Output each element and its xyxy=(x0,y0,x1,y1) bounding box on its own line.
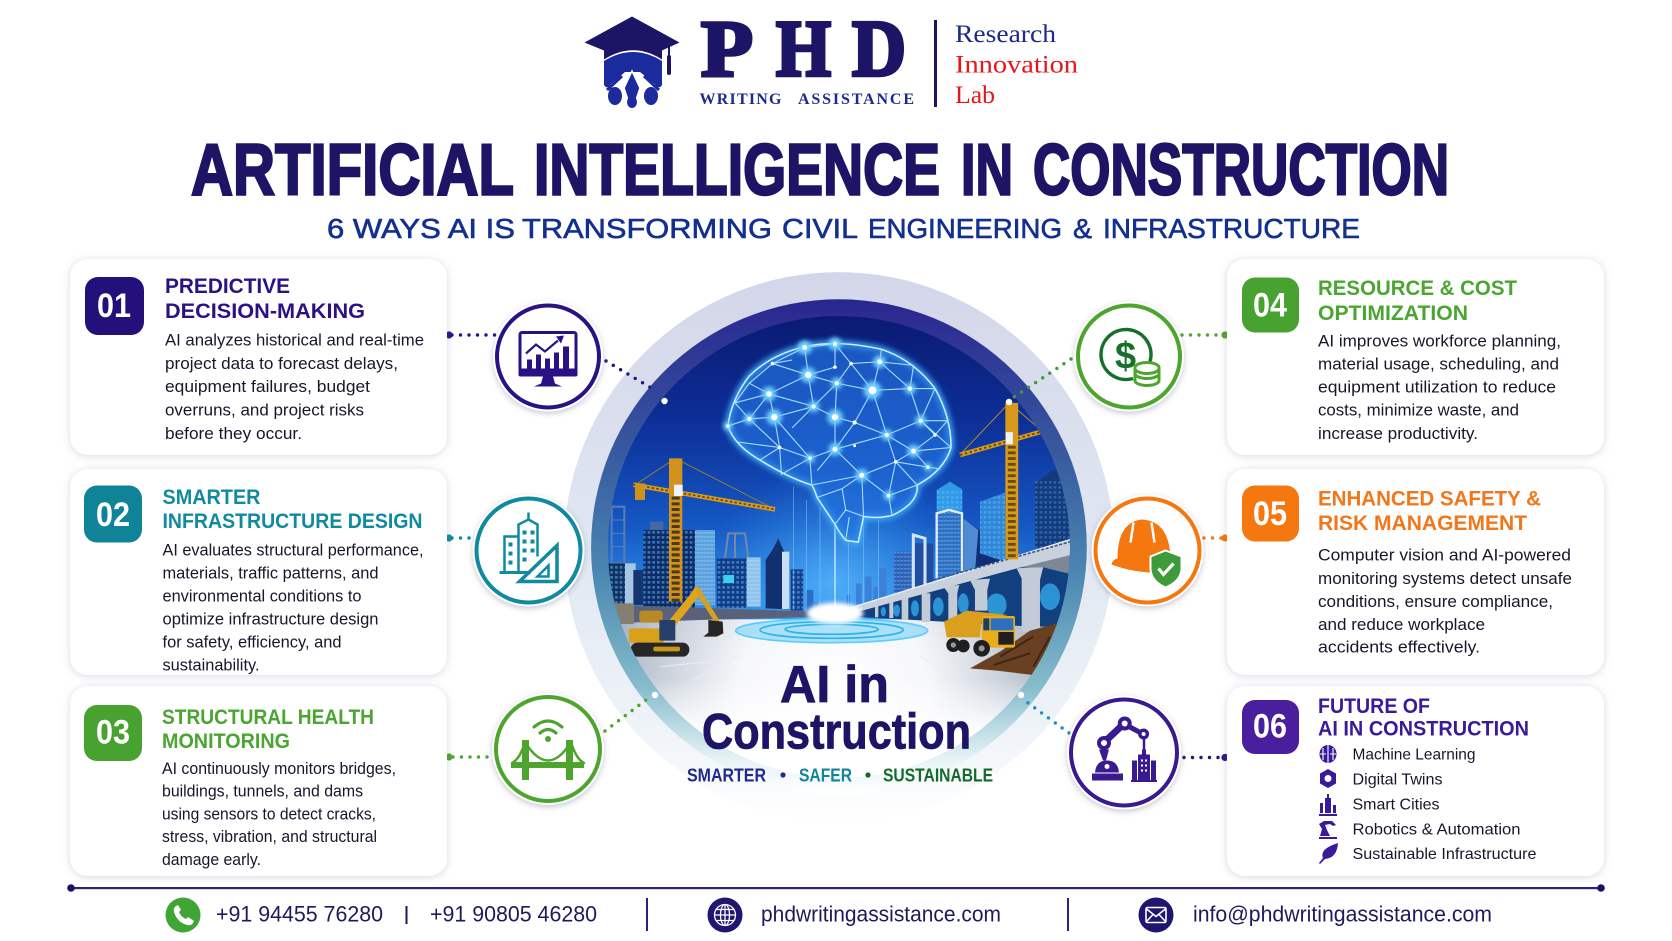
body text 02: environmental conditions to xyxy=(162,588,362,606)
tagline: writing assistance: WRITING xyxy=(700,91,782,108)
crane left xyxy=(633,458,775,602)
excavator xyxy=(629,588,723,657)
heading 01: PREDICTIVE xyxy=(165,274,290,298)
connectors xyxy=(452,335,1222,758)
body text 03: buildings, tunnels, and dams xyxy=(162,782,363,800)
heading 01 xyxy=(165,274,365,323)
buildings right xyxy=(847,470,1071,612)
PHD wordmark: P xyxy=(701,6,753,94)
list icons xyxy=(1319,745,1338,864)
title: ARTIFICIAL xyxy=(191,130,514,210)
body text 04: equipment utilization to reduce xyxy=(1318,378,1556,396)
body text 04: costs, minimize waste, and xyxy=(1318,402,1519,420)
body text 03: using sensors to detect cracks, xyxy=(162,806,376,824)
body text 01 xyxy=(165,332,424,443)
tagline: writing assistance xyxy=(700,91,914,108)
subtitle: TRANSFORMING xyxy=(522,213,772,244)
body text 05: and reduce workplace xyxy=(1318,616,1485,634)
heading 02: SMARTER xyxy=(162,485,261,509)
panel: 04 resource and cost optimization xyxy=(1227,259,1604,455)
lab name: Lab xyxy=(955,80,995,109)
central label: AI in Construction: Construction xyxy=(702,704,971,760)
badge number 06: 06 xyxy=(1253,708,1287,746)
PHD wordmark xyxy=(701,6,906,94)
title xyxy=(191,130,1449,210)
ground xyxy=(620,619,1058,778)
central tagline xyxy=(687,764,993,786)
heading 01: DECISION-MAKING xyxy=(165,299,365,323)
icon: safety helmet with shield xyxy=(1092,494,1204,606)
footer: website xyxy=(708,898,1001,932)
panel: 02 smarter infrastructure design xyxy=(70,469,447,675)
icon: dollar and coins: $ xyxy=(1115,336,1136,378)
PHD wordmark: H xyxy=(776,6,831,94)
panel: 05 enhanced safety and risk management xyxy=(1227,469,1604,675)
heading 02: INFRASTRUCTURE DESIGN xyxy=(162,509,422,533)
heading 04 xyxy=(1318,276,1517,325)
icon: dollar and coins xyxy=(1074,302,1184,412)
body text 02: optimize infrastructure design xyxy=(162,610,378,628)
heading 03: MONITORING xyxy=(162,729,290,753)
heading 04: RESOURCE & COST xyxy=(1318,276,1517,300)
central label: AI in Construction: AI in xyxy=(780,656,889,714)
dump truck xyxy=(944,611,1015,657)
icon: smart bridge with wifi xyxy=(492,693,604,805)
panel: 01 predictive decision-making xyxy=(70,259,447,455)
title: INTELLIGENCE xyxy=(534,130,940,210)
PHD wordmark: D xyxy=(852,6,906,94)
list text: Sustainable Infrastructure xyxy=(1352,846,1537,863)
body text 01: before they occur. xyxy=(165,425,302,443)
icon: buildings and set square xyxy=(472,494,584,606)
list text: Digital Twins xyxy=(1352,772,1442,788)
heading 05: ENHANCED SAFETY & xyxy=(1318,486,1541,510)
heading 02 xyxy=(162,485,422,533)
ground rings xyxy=(736,619,928,643)
title: CONSTRUCTION xyxy=(1033,130,1449,210)
subtitle: ENGINEERING xyxy=(868,213,1062,244)
body text 02: AI evaluates structural performance, xyxy=(162,542,424,560)
body text 05: monitoring systems detect unsafe xyxy=(1318,570,1572,588)
body text 05: accidents effectively. xyxy=(1318,638,1480,656)
heading 06 xyxy=(1318,694,1529,740)
body text 01: AI analyzes historical and real-time xyxy=(165,332,424,350)
body text 01: equipment failures, budget xyxy=(165,378,370,396)
heading 05: RISK MANAGEMENT xyxy=(1318,511,1527,535)
body text 05: conditions, ensure compliance, xyxy=(1318,593,1553,611)
bridge xyxy=(850,539,1071,632)
list text: Smart Cities xyxy=(1352,796,1440,814)
panel: 06 future of AI in construction xyxy=(1227,686,1604,876)
central label: AI in Construction xyxy=(702,656,971,760)
central tagline: SAFER xyxy=(799,764,852,786)
logo: PHD Writing Assistance xyxy=(584,6,1078,109)
badge number 02: 02 xyxy=(96,496,130,534)
body text 04: increase productivity. xyxy=(1318,425,1478,443)
body text 05: Computer vision and AI-powered xyxy=(1318,546,1571,564)
icon: robot arm and building xyxy=(1067,696,1181,810)
scene: AI brain over construction site xyxy=(608,316,1070,778)
heading 03: STRUCTURAL HEALTH xyxy=(162,705,374,729)
lab name: Innovation xyxy=(955,50,1078,78)
body text 01: overruns, and project risks xyxy=(165,402,364,420)
footer: phone contacts: +91 90805 46280 xyxy=(430,902,597,926)
subtitle: & xyxy=(1073,213,1092,244)
title: IN xyxy=(961,130,1013,210)
body text 03: AI continuously monitors bridges, xyxy=(162,760,396,778)
tagline: writing assistance: ASSISTANCE xyxy=(798,91,914,108)
list text: Robotics & Automation xyxy=(1352,822,1520,838)
heading 04: OPTIMIZATION xyxy=(1318,301,1468,325)
central circle illustration xyxy=(566,272,1111,782)
subtitle: CIVIL xyxy=(782,213,858,244)
body text 04: AI improves workforce planning, xyxy=(1318,332,1561,350)
road markings xyxy=(660,655,962,680)
central tagline: SMARTER xyxy=(687,764,766,786)
central tagline: SUSTAINABLE xyxy=(883,764,993,786)
body text 02 xyxy=(162,542,424,674)
body text 04 xyxy=(1318,332,1561,443)
body text 03: stress, vibration, and structural xyxy=(162,828,377,846)
badge number 03: 03 xyxy=(96,714,130,752)
body text 01: project data to forecast delays, xyxy=(165,355,398,373)
crane right xyxy=(960,403,1042,559)
heading 03 xyxy=(162,705,374,753)
badge number 01: 01 xyxy=(97,287,131,325)
footer: email xyxy=(1138,898,1492,932)
subtitle: 6 WAYS AI IS xyxy=(327,213,515,244)
connector end dots xyxy=(445,331,1229,761)
footer: phone contacts: +91 94455 76280 xyxy=(216,902,383,926)
subtitle xyxy=(327,213,1360,244)
lab name xyxy=(955,19,1078,109)
icon: glowing neural brain xyxy=(724,337,951,542)
badge number 04: 04 xyxy=(1253,286,1287,324)
body text 02: materials, traffic patterns, and xyxy=(162,564,378,582)
buildings left xyxy=(608,507,819,612)
badge number 05: 05 xyxy=(1253,495,1287,533)
heading 06: FUTURE OF xyxy=(1318,694,1430,718)
footer: website: phdwritingassistance.com xyxy=(761,902,1001,926)
footer: email: info@phdwritingassistance.com xyxy=(1193,902,1492,926)
body text 03: damage early. xyxy=(162,851,261,869)
lab name: Research xyxy=(955,19,1056,48)
body text 05 xyxy=(1318,546,1572,656)
footer divider line xyxy=(67,884,1605,892)
panel: 03 structural health monitoring xyxy=(70,686,447,876)
dirt pile xyxy=(970,623,1057,675)
body text 02: for safety, efficiency, and xyxy=(162,634,342,652)
icon: analytics monitor xyxy=(493,302,603,412)
heading 06: AI IN CONSTRUCTION xyxy=(1318,716,1529,740)
body text 02: sustainability. xyxy=(162,656,260,674)
body text 04: material usage, scheduling, and xyxy=(1318,356,1559,374)
list text: Machine Learning xyxy=(1352,746,1476,764)
heading 05 xyxy=(1318,486,1541,535)
data beams xyxy=(793,487,878,613)
footer: phone contacts xyxy=(166,898,597,932)
subtitle: INFRASTRUCTURE xyxy=(1103,213,1360,244)
body text 03 xyxy=(162,760,396,869)
city, bridge and machinery xyxy=(608,458,1070,778)
list text xyxy=(1352,746,1537,863)
icon: graduation cap with pen nib xyxy=(584,16,680,108)
